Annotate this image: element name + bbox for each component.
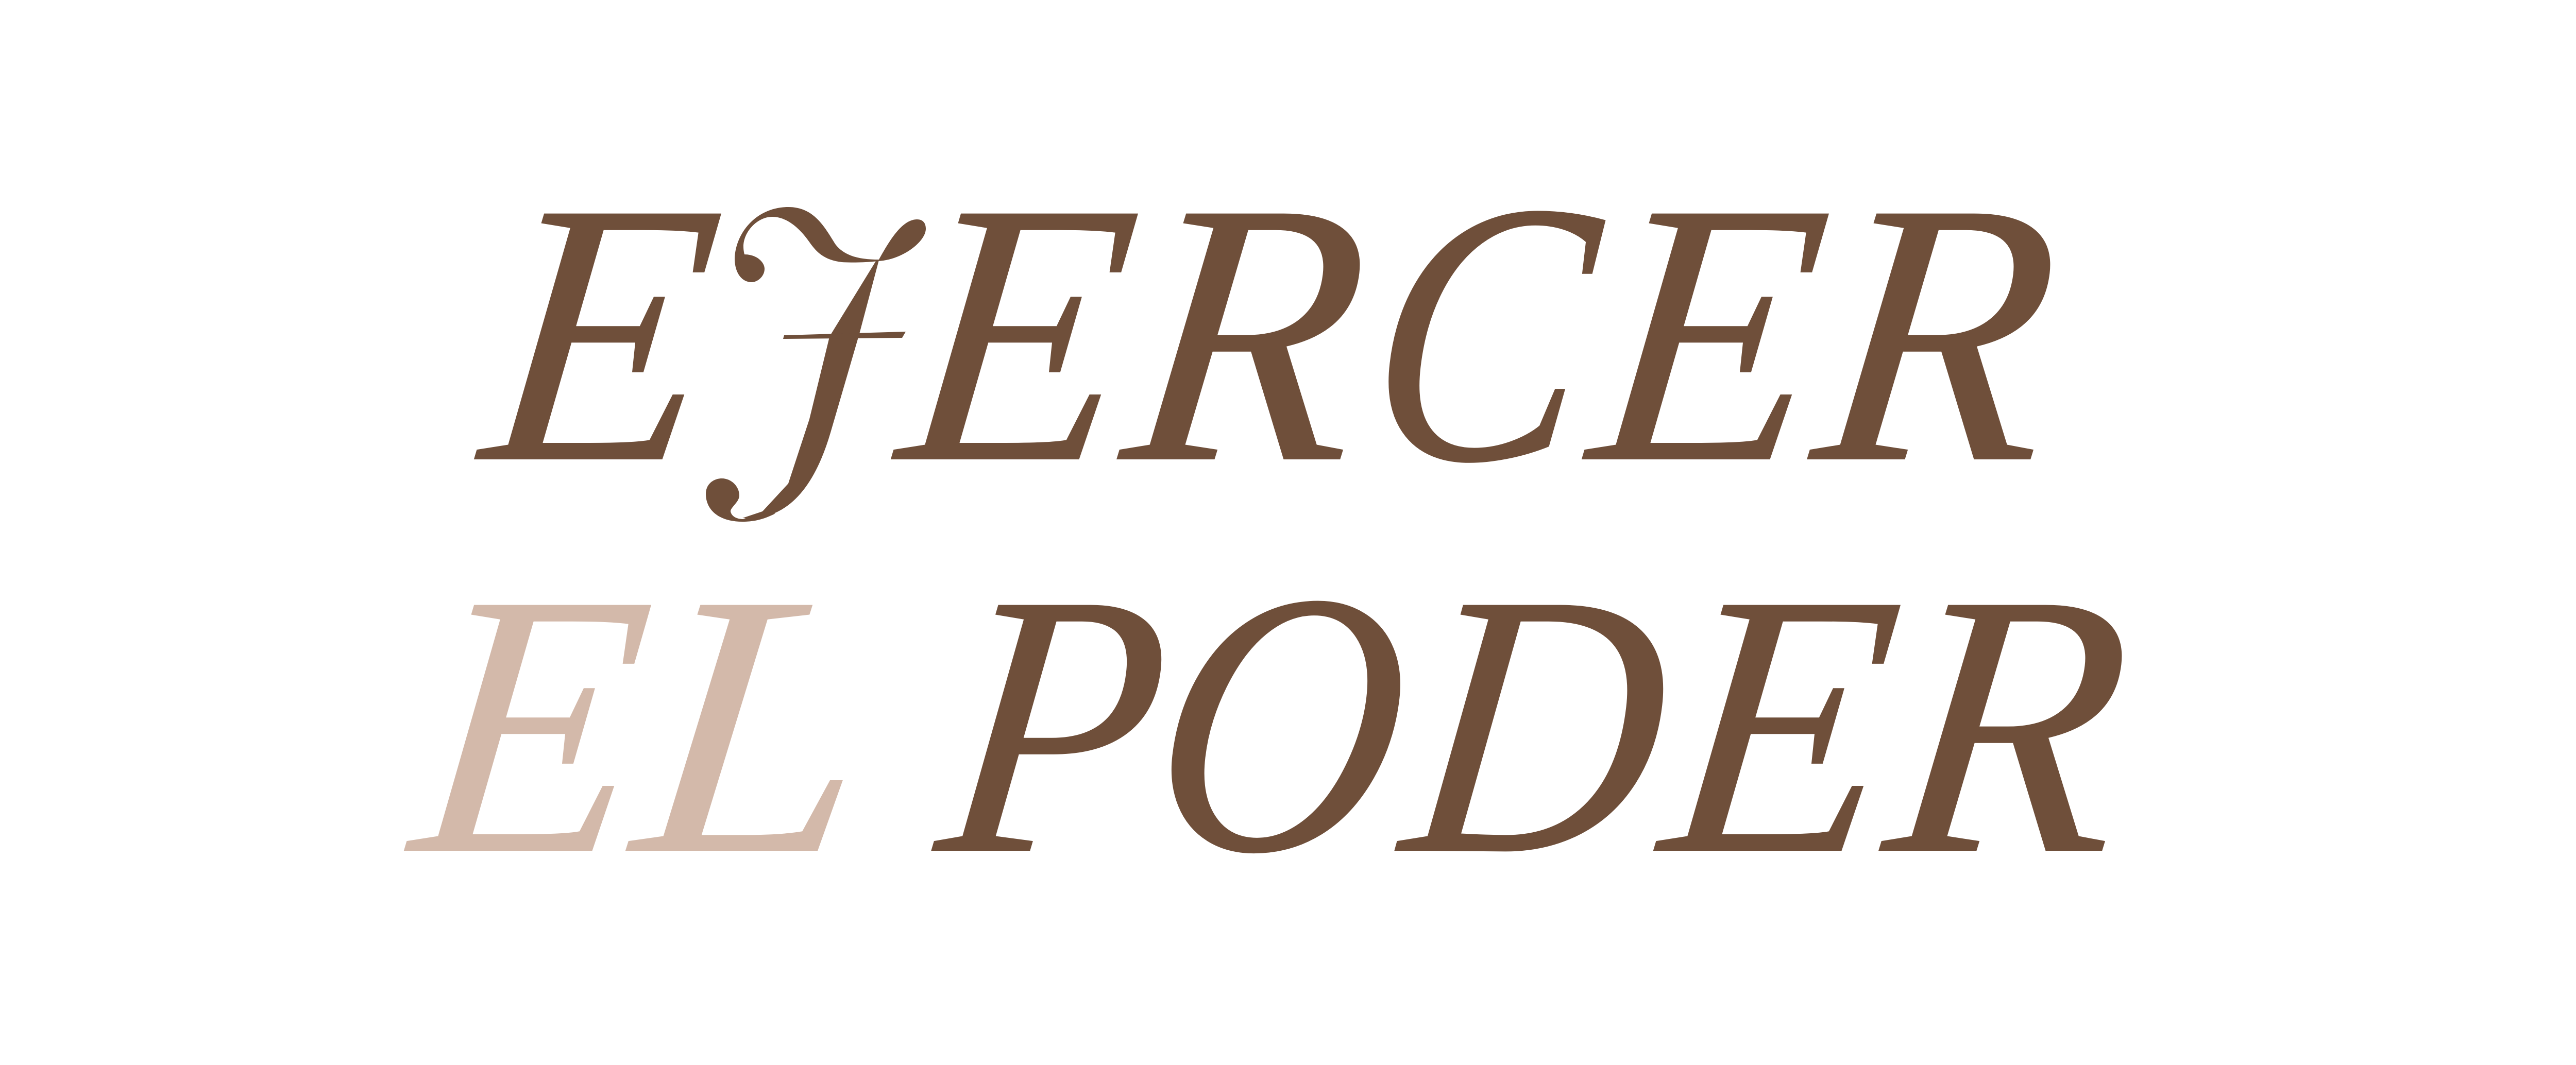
letter E: E bbox=[880, 125, 1154, 541]
letter E: E bbox=[393, 517, 667, 933]
letter P: P bbox=[918, 516, 1188, 932]
title line: EL (light) bbox=[393, 516, 893, 933]
letter C: C bbox=[1351, 125, 1620, 541]
letter E: E bbox=[1571, 125, 1845, 541]
title line: PODER bbox=[918, 516, 2149, 933]
letter E: E bbox=[1642, 517, 1917, 933]
letter L: L bbox=[614, 516, 893, 932]
letter E: E bbox=[463, 125, 737, 541]
canvas: title artwork bbox=[404, 207, 2122, 854]
letter D: D bbox=[1383, 516, 1689, 932]
letter R: R bbox=[1103, 126, 1387, 541]
letter R: R bbox=[1865, 517, 2149, 932]
letter O: O bbox=[1135, 516, 1429, 932]
title line: EJERCER bbox=[463, 125, 2078, 599]
swash letter J bbox=[706, 207, 926, 522]
letter R: R bbox=[1793, 126, 2078, 541]
swash letter J: J bbox=[692, 168, 920, 599]
